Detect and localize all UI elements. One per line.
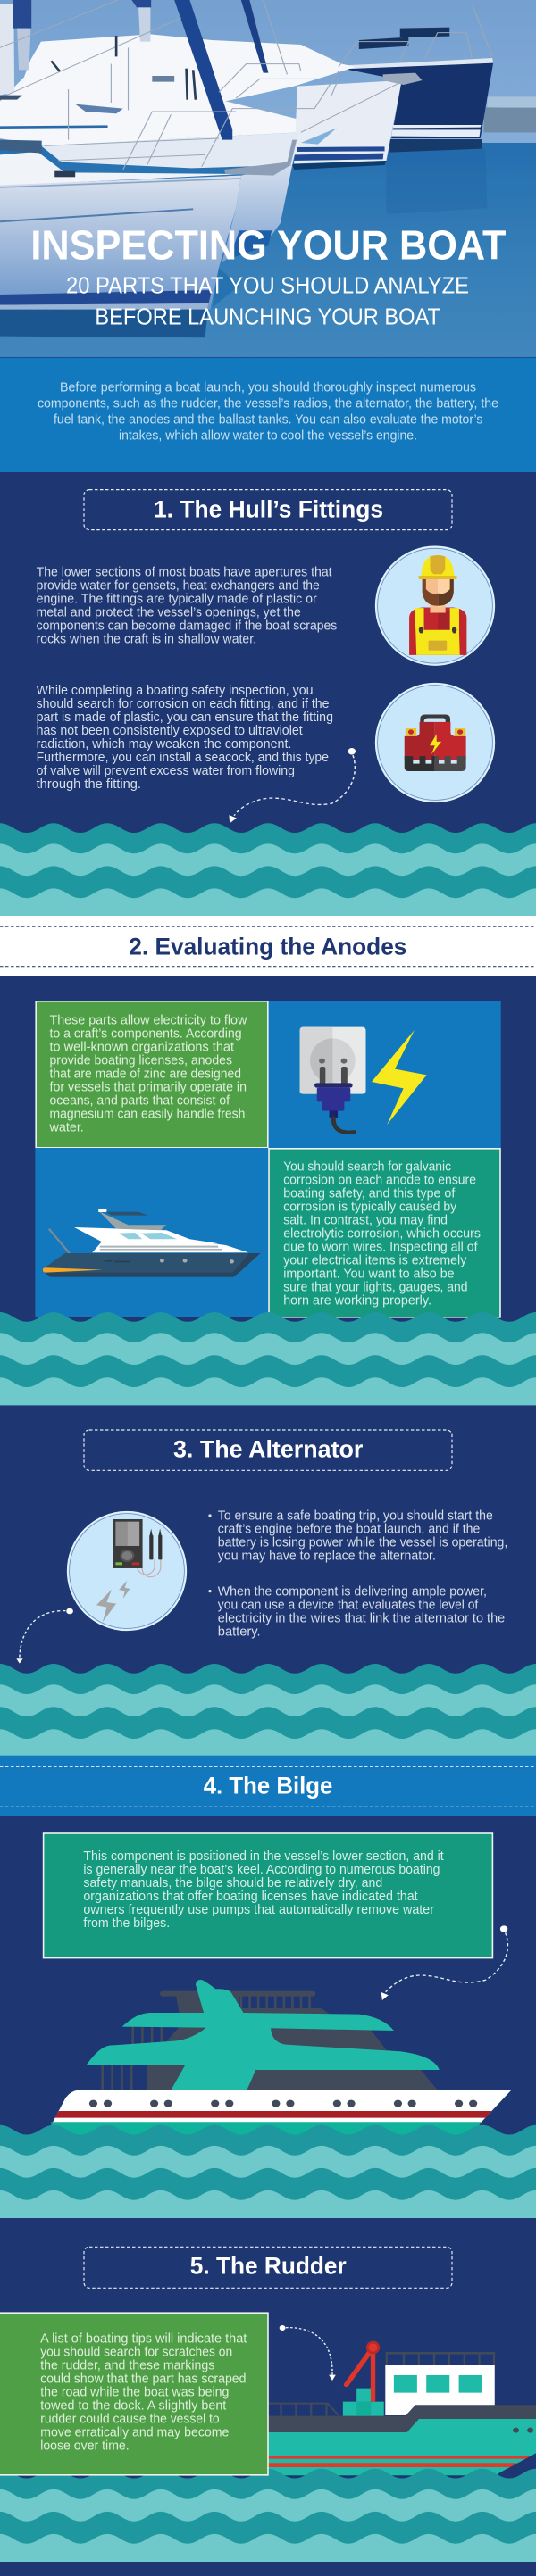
panel: introduction <box>0 358 536 472</box>
text: paragraph 1 <box>37 566 337 647</box>
illustration: motor yacht <box>51 1980 512 2135</box>
cell: anode text on green: magnesium can easily handle fresh <box>50 1107 245 1121</box>
panel: introduction: Before performing a boat launch, you should thoroughly inspect numerous <box>60 380 476 395</box>
arrow: dashed curve to waves <box>16 1608 73 1664</box>
cell: corrosion text on teal: salt. In contrast, you may find <box>283 1214 448 1228</box>
text: paragraph 2: has not been consistently exposed to ultraviolet <box>37 724 303 738</box>
waves <box>0 2125 536 2306</box>
bullet 2: battery. <box>218 1625 261 1639</box>
callout: rudder text: rudder could cause the vessel to <box>40 2412 220 2426</box>
text: paragraph 1: provide water for gensets, heat exchangers and the <box>37 579 320 594</box>
callout: bilge text: safety manuals, the bilge should be relatively dry, and <box>83 1876 382 1890</box>
cell: corrosion text on teal: horn are working properly. <box>283 1294 431 1309</box>
cell: anode text on green: that are made of zinc are designed <box>50 1067 241 1081</box>
icon: battery <box>376 684 494 802</box>
cell: corrosion text on teal: boating safety, and this type of <box>283 1187 456 1201</box>
callout: rudder text: loose over time. <box>40 2439 130 2453</box>
waves <box>0 1664 536 1845</box>
cell: corrosion text on teal: You should search for galvanic <box>283 1160 451 1175</box>
cell: anode text on green: for vessels that primarily operate in <box>50 1080 247 1094</box>
cell: plug image <box>268 1001 501 1148</box>
callout: rudder text: move erratically and may become <box>40 2425 229 2439</box>
panel: section 2 heading band <box>0 916 536 976</box>
heading: the hull's fittings <box>84 490 452 530</box>
panel: section 2 grid <box>0 1001 536 1493</box>
cell: anode text on green: to well-known organizations that <box>50 1040 234 1054</box>
bullet list <box>208 1509 507 1639</box>
text: paragraph 1: The lower sections of most boats have apertures that <box>37 566 332 580</box>
waves <box>0 1312 536 1493</box>
callout: rudder text: the rudder, and these markings <box>40 2358 214 2372</box>
text: paragraph 1: metal and protect the vessel’s openings, yet the <box>37 606 301 620</box>
callout: bilge text <box>44 1833 492 1958</box>
illustration: work boat <box>268 2341 536 2477</box>
bullet 1: craft’s engine before the boat launch, and if the <box>218 1523 480 1537</box>
callout: bilge text: This component is positioned in the vessel’s lower section, and it <box>83 1849 444 1864</box>
cell: anode text on green: to a craft’s components. According <box>50 1026 242 1041</box>
panel: section 4 <box>0 1833 536 2306</box>
heading: the rudder <box>84 2247 452 2288</box>
callout: rudder text: towed to the dock. A slightly bent <box>40 2398 226 2413</box>
callout: rudder text: could show that the part has scraped <box>40 2372 247 2386</box>
cell: corrosion text on teal <box>269 1149 500 1317</box>
cell: anode text on green: oceans, and parts that consist of <box>50 1093 230 1108</box>
callout: rudder text: the road while the boat was being <box>40 2385 229 2399</box>
panel: introduction: fuel tank, the anodes and the ballast tanks. You can also evaluate the motor’s <box>54 412 482 427</box>
cell: anode text on green: provide boating licenses, anodes <box>50 1053 232 1068</box>
cell: corrosion text on teal: your electrical items is extremely <box>283 1254 467 1268</box>
heading: the alternator: 3. The Alternator <box>173 1436 364 1463</box>
subtitle line 2: BEFORE LAUNCHING YOUR BOAT <box>95 303 440 329</box>
title <box>30 222 506 329</box>
callout: bilge text: is generally near the boat’s keel. According to numerous boating <box>83 1863 440 1877</box>
bullet 2: you can use a device that evaluates the level of <box>218 1598 479 1612</box>
cell: corrosion text on teal: corrosion on each anode to ensure <box>283 1174 476 1188</box>
heading: the rudder: 5. The Rudder <box>190 2253 347 2280</box>
bullet 2: When the component is delivering ample power, <box>218 1584 487 1599</box>
heading: the hull's fittings: 1. The Hull’s Fittings <box>154 496 383 523</box>
text: paragraph 2: of valve will prevent excess water from flowing <box>37 764 295 778</box>
arrow: dashed curve to work boat <box>280 2325 336 2381</box>
text: paragraph 2: While completing a boating safety inspection, you <box>37 684 313 698</box>
bullet 1: you may have to replace the alternator. <box>218 1550 436 1564</box>
subtitle line 1: 20 PARTS THAT YOU SHOULD ANALYZE <box>66 272 469 299</box>
text: paragraph 1: rocks when the craft is in shallow water. <box>37 633 256 647</box>
callout: bilge text: organizations that offer boating licenses have indicated that <box>83 1890 418 1904</box>
bullet 1: To ensure a safe boating trip, you should start the <box>218 1509 493 1524</box>
text: paragraph 1: engine. The fittings are typically made of plastic or <box>37 593 317 607</box>
cell: corrosion text on teal: electrolytic corrosion, which occurs <box>283 1227 481 1242</box>
bullet 2 <box>208 1584 505 1639</box>
callout: bilge text: from the bilges. <box>83 1916 170 1931</box>
text: paragraph 2: part is made of plastic, you can ensure that the fitting <box>37 710 333 725</box>
bullet 1: battery is losing power while the vessel is operating, <box>218 1536 507 1550</box>
cell: corrosion text on teal: sure that your lights, gauges, and <box>283 1281 468 1295</box>
callout: rudder text: A list of boating tips will indicate that <box>40 2331 247 2346</box>
text: paragraph 2: should search for corrosion on each fitting, and if the <box>37 697 329 711</box>
callout: rudder text: you should search for scratches on <box>40 2345 232 2359</box>
text: paragraph 2 <box>37 684 333 792</box>
bullet 2: electricity in the wires that link the alternator to the <box>218 1611 505 1625</box>
cell: yacht image <box>35 1148 268 1317</box>
waves <box>0 823 536 1004</box>
icon: multimeter <box>68 1512 186 1630</box>
heading: the alternator <box>84 1430 452 1470</box>
text: paragraph 1: components can become damaged if the boat scrapes <box>37 619 337 634</box>
panel: section 5 <box>0 2247 536 2576</box>
cell: anode text on green: water. <box>49 1120 84 1134</box>
text: paragraph 2: through the fitting. <box>37 777 141 792</box>
hero: marina photo <box>0 0 536 357</box>
waves <box>0 2469 536 2576</box>
arrow: dashed curve to boat <box>381 1925 507 2000</box>
bullet 1 <box>208 1509 507 1564</box>
cell: corrosion text on teal: due to worn wires. Inspecting all of <box>283 1241 479 1255</box>
panel: section 4 heading band: 4. The Bilge <box>204 1772 332 1799</box>
callout: rudder text <box>0 2313 268 2475</box>
cell: anode text on green <box>36 1001 268 1148</box>
arrow: dashed curve to waves <box>229 748 356 823</box>
cell: corrosion text on teal: corrosion is typically caused by <box>283 1201 457 1215</box>
cell: anode text on green: These parts allow electricity to flow <box>50 1013 247 1027</box>
text: paragraph 2: Furthermore, you can install a seacock, and this type <box>37 751 329 765</box>
text: paragraph 2: radiation, which may weaken the component. <box>37 737 291 752</box>
icon: worker <box>376 546 494 665</box>
panel: section 3 <box>0 1430 536 1845</box>
panel: introduction: intakes, which allow water to cool the vessel’s engine. <box>119 429 417 444</box>
cell: corrosion text on teal: important. You want to also be <box>283 1267 455 1282</box>
panel: section 1 <box>0 490 536 1004</box>
panel: section 2 heading band: 2. Evaluating the Anodes <box>129 933 406 960</box>
callout: bilge text: owners frequently use pumps that automatically remove water <box>83 1903 434 1917</box>
panel: section 4 heading band <box>0 1756 536 1816</box>
panel: introduction: components, such as the rudder, the vessel’s radios, the alternator, the battery, the <box>38 396 498 411</box>
main title: INSPECTING YOUR BOAT <box>30 222 506 269</box>
